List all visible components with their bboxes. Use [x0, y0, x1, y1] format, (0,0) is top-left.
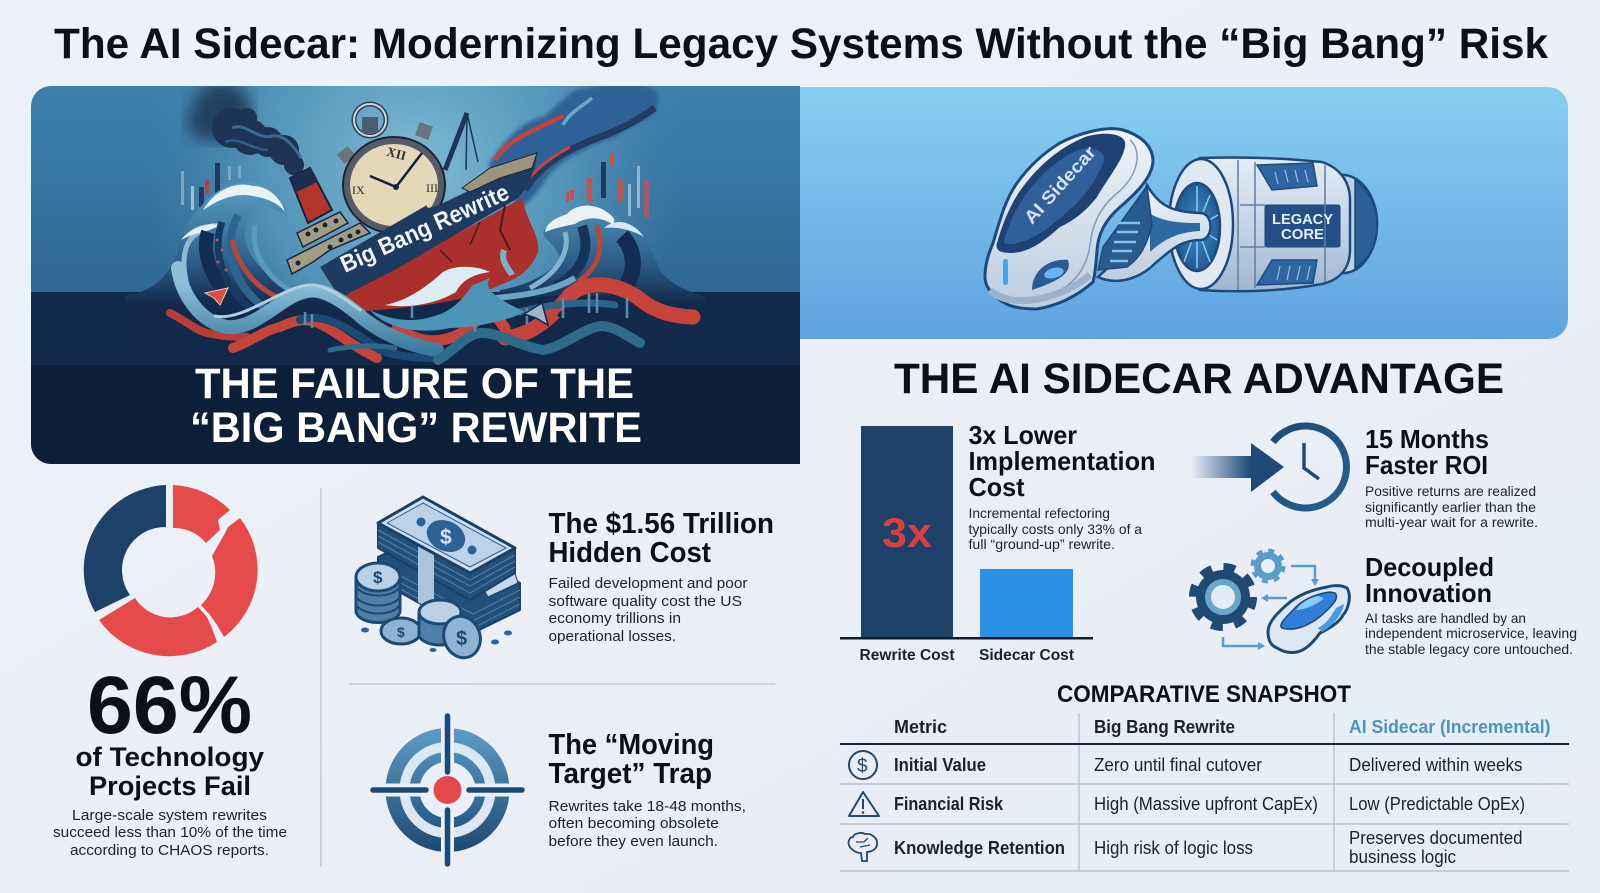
stat: 66% of technology projects fail: Large-scale system rewrites [72, 807, 267, 824]
table header: AI Sidecar (Incremental) [1349, 717, 1550, 737]
text block: decoupled innovation: AI tasks are handled by an [1365, 610, 1526, 626]
text block: 15 months faster ROI: 15 Months [1365, 424, 1489, 454]
icon: stopwatch: XII [385, 144, 408, 163]
core label: LEGACY [1272, 212, 1333, 228]
text block: hidden cost: software quality cost the US [548, 593, 742, 610]
table header [894, 717, 1550, 737]
row: financial risk: Low (Predictable OpEx) [1349, 794, 1525, 814]
text block: 15 months faster ROI: significantly earlier than the [1365, 499, 1536, 515]
icon: stopwatch: IX [352, 183, 365, 197]
text block: 3x lower implementation cost [968, 420, 1156, 552]
text block: decoupled innovation [1365, 552, 1577, 657]
icon: sidecar pod [985, 129, 1153, 309]
panel heading: “BIG BANG” REWRITE [190, 404, 642, 452]
table header: Big Bang Rewrite [1094, 717, 1235, 737]
text block: 15 months faster ROI [1365, 424, 1538, 530]
text block: 15 months faster ROI: multi-year wait for a rewrite. [1365, 514, 1538, 530]
icon: grey paper plane [524, 303, 548, 325]
icon: sidecar pod: AI Sidecar [1020, 142, 1100, 228]
row: knowledge retention: business logic [1349, 847, 1456, 867]
text block: hidden cost [548, 508, 774, 645]
row: initial value: Zero until final cutover [1094, 755, 1262, 775]
text block: moving target trap [548, 729, 746, 850]
icon: chimney [290, 168, 332, 223]
stat: 66% of technology projects fail: 66% [87, 660, 252, 751]
panel: failure of the big bang rewrite hero [31, 82, 800, 464]
ship name: Big Bang Rewrite [336, 179, 513, 278]
core label [1272, 212, 1333, 243]
icon: ship hull [320, 153, 538, 312]
chart: 66% donut [84, 485, 258, 656]
icon: right smoke plume [488, 82, 659, 208]
text block: hidden cost: Hidden Cost [548, 537, 711, 569]
table: comparative snapshot [840, 713, 1569, 871]
text block: moving target trap: often becoming obsolete [548, 815, 719, 832]
icon: target [373, 716, 522, 864]
icon: falling data bars [181, 154, 649, 218]
coins [356, 563, 486, 663]
icon: foreground waves [150, 268, 695, 362]
table header: Metric [894, 717, 947, 737]
heading: advantage: THE AI SIDECAR ADVANTAGE [894, 355, 1504, 403]
icon: money stacks and coins: $ [440, 526, 452, 549]
chart: rewrite vs sidecar cost bars [840, 426, 1093, 664]
text block: 3x lower implementation cost: full “ground-up” rewrite. [968, 536, 1115, 552]
icon: left wave [125, 182, 320, 309]
text block: moving target trap: before they even launch. [548, 833, 718, 850]
row: knowledge retention: Preserves documented [1349, 828, 1522, 848]
row: knowledge retention: Knowledge Retention [894, 838, 1065, 858]
text block: hidden cost: economy trillions in [548, 610, 681, 627]
text block: hidden cost: operational losses. [548, 628, 676, 645]
icon: right wave [495, 206, 705, 300]
icon: money stacks and coins: $ [456, 628, 467, 650]
row: knowledge retention: High risk of logic loss [1094, 838, 1253, 858]
stat: 66% of technology projects fail: Projects Fail [89, 771, 251, 801]
row: initial value: Initial Value [894, 755, 986, 775]
icon: gears and pod [1193, 551, 1349, 653]
icon: stopwatch: III [426, 181, 438, 195]
text block: hidden cost: The $1.56 Trillion [548, 508, 774, 540]
text block: moving target trap: Rewrites take 18-48 months, [548, 798, 746, 815]
icon: money stacks and coins [356, 497, 520, 663]
row: initial value: $ [857, 756, 868, 777]
row: financial risk [849, 792, 1525, 816]
text block: 3x lower implementation cost: Cost [968, 472, 1025, 502]
text block: 3x lower implementation cost: typically costs only 33% of a [968, 521, 1142, 537]
icon: money stacks and coins: $ [397, 624, 405, 640]
icon: ship cabins [287, 212, 370, 274]
icon: left smoke plume [187, 82, 304, 175]
panel heading [193, 368, 640, 442]
text block: 15 months faster ROI: Faster ROI [1365, 450, 1488, 480]
stat: 66% of technology projects fail: succeed less than 10% of the time [53, 824, 287, 841]
text block: moving target trap: Target” Trap [548, 758, 712, 790]
text block: 3x lower implementation cost: 3x Lower [968, 420, 1077, 450]
stat: 66% of technology projects fail [53, 660, 287, 859]
icon: red paper plane [205, 288, 228, 305]
panel heading: THE FAILURE OF THE [195, 360, 634, 408]
stat: 66% of technology projects fail: according to CHAOS reports. [70, 842, 269, 859]
text block: decoupled innovation: independent microservice, leaving [1365, 625, 1577, 641]
chart: rewrite vs sidecar cost bars: Rewrite Cost [860, 647, 955, 664]
panel: AI sidecar hero [800, 87, 1568, 339]
icon: arrow into clock [1191, 426, 1346, 508]
core label: CORE [1281, 227, 1324, 243]
text block: decoupled innovation: the stable legacy core untouched. [1365, 641, 1573, 657]
title: The AI Sidecar: Modernizing Legacy Systems Without the “Big Bang” Risk [54, 20, 1548, 68]
text block: moving target trap: The “Moving [548, 729, 714, 761]
row: financial risk: High (Massive upfront CapEx) [1094, 794, 1318, 814]
row: initial value [849, 751, 1522, 779]
icon: money stacks and coins: $ [373, 568, 383, 587]
icon: legacy core cylinder [1169, 157, 1377, 291]
icon: mast and rigging [445, 113, 478, 170]
text block: decoupled innovation: Innovation [1365, 578, 1492, 608]
text block: 15 months faster ROI: Positive returns are realized [1365, 483, 1536, 499]
chart: rewrite vs sidecar cost bars: 3x [882, 509, 933, 556]
row: financial risk: Financial Risk [894, 794, 1004, 814]
text block: decoupled innovation: Decoupled [1365, 552, 1494, 582]
text block: 3x lower implementation cost: Incremental refectoring [968, 505, 1110, 521]
text block: 3x lower implementation cost: Implementation [968, 446, 1156, 476]
row: knowledge retention [848, 828, 1522, 867]
stat: 66% of technology projects fail: of Technology [76, 742, 264, 772]
row: initial value: Delivered within weeks [1349, 755, 1522, 775]
heading: comparative snapshot: COMPARATIVE SNAPSHOT [1057, 681, 1351, 708]
icon: foam crest [370, 267, 525, 331]
text block: hidden cost: Failed development and poor [548, 575, 748, 592]
chart: rewrite vs sidecar cost bars: Sidecar Cost [979, 647, 1075, 664]
icon: stopwatch [337, 104, 445, 233]
icon: connector arm [1098, 185, 1210, 281]
